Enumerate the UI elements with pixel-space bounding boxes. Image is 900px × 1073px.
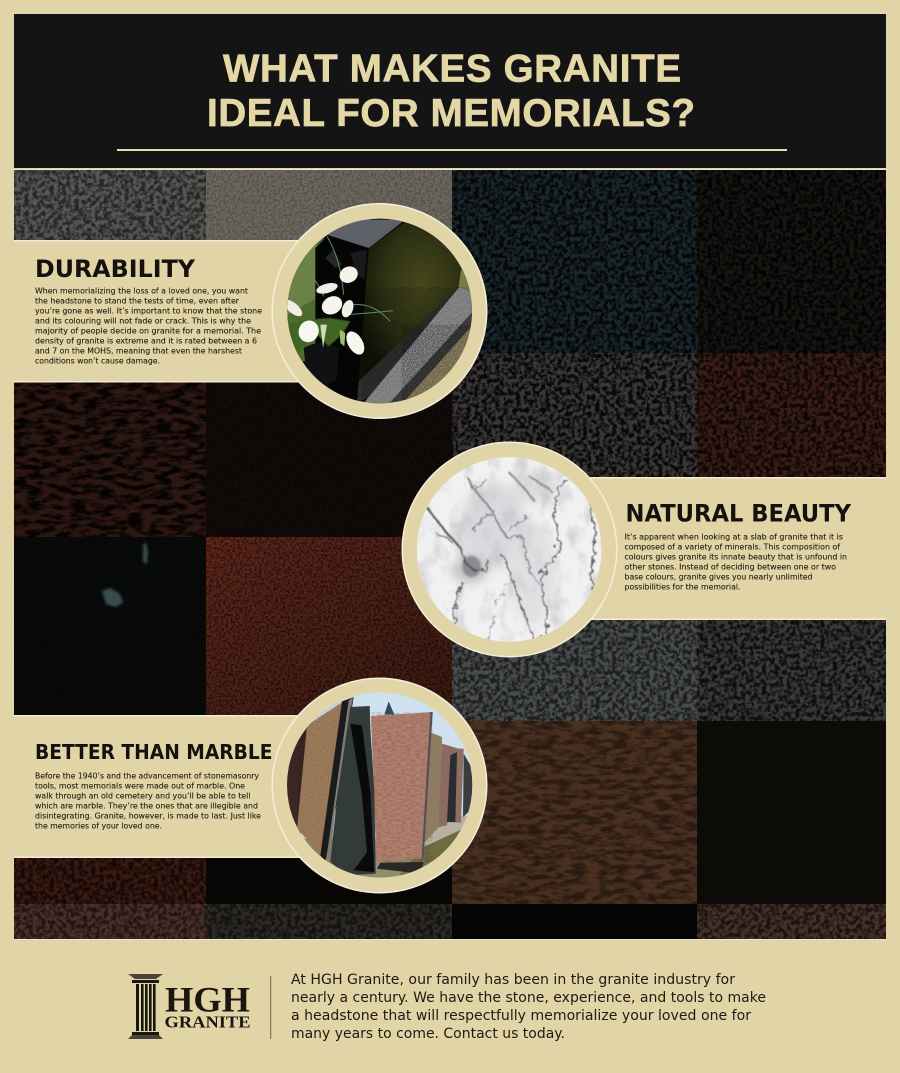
logo wordmark: HGH (165, 980, 250, 1020)
panel: durability (0, 240, 320, 382)
heading: natural beauty: NATURAL BEAUTY (626, 500, 852, 528)
text: durability body: you’re gone as well. It’s important to know that the stone (35, 305, 262, 315)
text: durability body: conditions won’t cause damage. (35, 356, 160, 366)
title (207, 48, 695, 135)
text: better than marble body: which are marble. They’re the ones that are illegible and (35, 800, 258, 810)
panel: better than marble (0, 715, 320, 858)
text: better than marble body: Before the 1940’s and the advancement of stonemasonry (35, 770, 259, 780)
footer text: nearly a century. We have the stone, experience, and tools to make (291, 989, 766, 1006)
footer text: At HGH Granite, our family has been in the granite industry for (291, 971, 735, 988)
text: natural beauty body: possibilities for the memorial. (624, 582, 740, 592)
text: durability body: and its colouring will not fade or crack. This is why the (35, 315, 251, 325)
heading: durability: DURABILITY (35, 255, 196, 283)
title: WHAT MAKES GRANITE (223, 48, 681, 90)
footer text: a headstone that will respectfully memorialize your loved one for (291, 1007, 751, 1024)
text: better than marble body (35, 770, 261, 830)
text: natural beauty body: It’s apparent when looking at a slab of granite that it is (624, 531, 843, 541)
text: durability body: When memorializing the loss of a loved one, you want (35, 285, 249, 295)
circle: durability headstone photo (272, 203, 488, 419)
circle: granite slabs photo (272, 678, 488, 894)
text: better than marble body: tools, most memorials were made out of marble. One (35, 780, 245, 790)
text: durability body: and 7 on the MOHS, meaning that even the harshest (35, 346, 243, 356)
text: better than marble body: walk through an old cemetery and you’ll be able to tell (35, 790, 250, 800)
header band (14, 14, 886, 168)
flowers (281, 236, 393, 358)
text: better than marble body: the memories of your loved one. (35, 820, 162, 830)
footer text: many years to come. Contact us today. (291, 1025, 565, 1042)
text: better than marble body: disintegrating. Granite, however, is made to last. Just like (35, 810, 261, 820)
text: natural beauty body: composed of a variety of minerals. This composition of (624, 541, 841, 551)
text: natural beauty body (624, 531, 847, 592)
mineral flecks (102, 542, 148, 607)
text: durability body: majority of people decide on granite for a memorial. The (35, 325, 261, 335)
footer text (291, 971, 766, 1042)
text: durability body: density of granite is extreme and it is rated between a 6 (35, 336, 257, 346)
granite tile background (14, 169, 886, 940)
circle: marble photo (402, 442, 618, 658)
title: IDEAL FOR MEMORIALS? (207, 92, 695, 135)
footer logo (128, 974, 250, 1039)
panel: natural beauty (590, 477, 900, 620)
text: natural beauty body: colours gives granite its innate beauty that is unfound in (624, 551, 847, 561)
text: durability body (35, 285, 262, 366)
heading: better than marble: BETTER THAN MARBLE (35, 740, 272, 764)
icon: column (128, 974, 163, 1039)
text: durability body: the headstone to stand the tests of time, even after (35, 295, 240, 305)
logo wordmark: GRANITE (164, 1012, 250, 1032)
text: natural beauty body: base colours, granite gives you nearly unlimited (624, 571, 812, 581)
text: natural beauty body: other stones. Instead of deciding between one or two (624, 561, 836, 571)
